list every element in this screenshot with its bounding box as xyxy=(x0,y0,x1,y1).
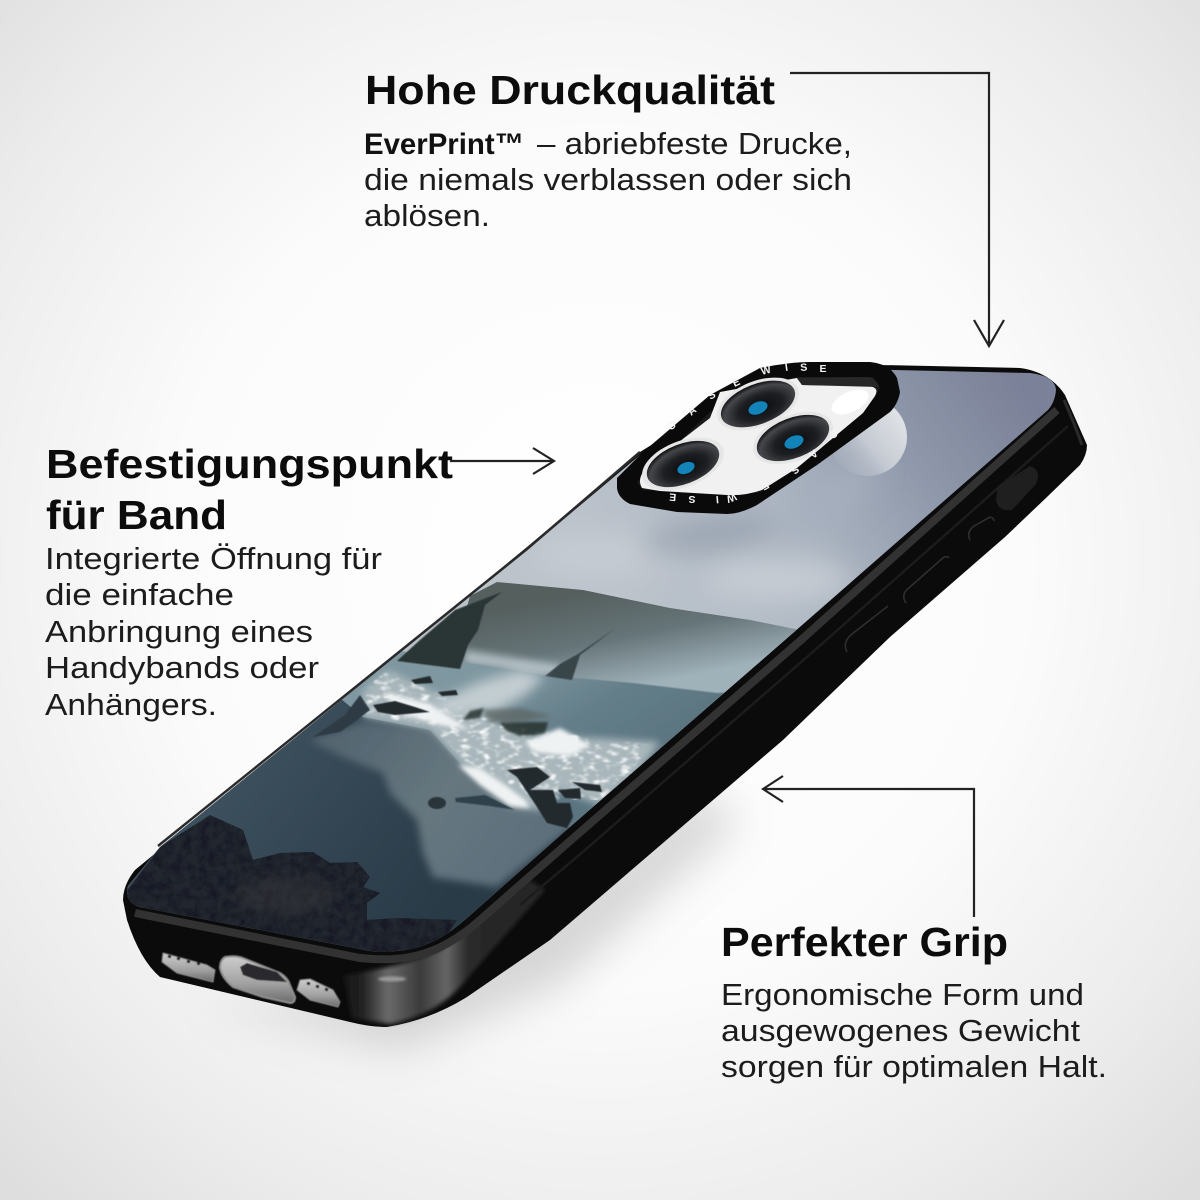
heading: Hohe Druckqualität xyxy=(365,67,775,113)
volume down button xyxy=(845,606,888,652)
heading: für Band xyxy=(46,492,227,538)
speaker right xyxy=(297,979,340,1007)
rock lighter centre xyxy=(238,876,331,914)
description: ausgewogenes Gewicht xyxy=(721,1013,1080,1048)
lens left xyxy=(635,427,731,501)
case corner highlight xyxy=(343,880,545,1024)
brand text bottom: CASEWISE xyxy=(669,427,840,505)
module flash xyxy=(828,384,872,420)
description xyxy=(45,541,382,722)
clouds xyxy=(588,511,854,609)
moon xyxy=(835,408,907,476)
description xyxy=(364,126,852,233)
beach pebble xyxy=(428,797,446,809)
description: die niemals verblassen oder sich xyxy=(364,162,852,197)
phone xyxy=(100,340,1100,1027)
callout: print quality xyxy=(364,67,1004,346)
module shading xyxy=(797,377,879,387)
description: EverPrint™ xyxy=(364,128,524,161)
description: – abriebfeste Drucke, xyxy=(537,126,852,161)
description: die einfache xyxy=(45,577,234,612)
lens top xyxy=(710,367,806,441)
corner glint xyxy=(378,976,406,982)
description xyxy=(721,977,1107,1084)
crest brown xyxy=(482,708,552,722)
beach wet streak xyxy=(455,795,515,810)
callout: strap attachment xyxy=(45,441,554,722)
description: Handybands oder xyxy=(45,650,319,685)
foam white core xyxy=(385,692,590,808)
camera bumper xyxy=(617,362,900,514)
speaker grille side xyxy=(996,466,1038,510)
callout: grip xyxy=(721,776,1107,1084)
arrow to print xyxy=(790,73,1004,346)
sea xyxy=(312,650,725,851)
description: Ergonomische Form und xyxy=(721,977,1084,1012)
sky xyxy=(127,370,1056,952)
arrow to case side xyxy=(763,776,974,917)
screen edge line xyxy=(158,452,640,846)
charging port xyxy=(220,956,295,1003)
near rocks xyxy=(507,767,573,828)
small rocks xyxy=(411,676,458,696)
shore rocks xyxy=(313,676,602,828)
phone shadow xyxy=(200,790,740,1050)
action button xyxy=(969,517,994,540)
volume up button xyxy=(904,557,949,603)
flat rock xyxy=(373,701,430,715)
description: Anhängers. xyxy=(45,687,217,722)
description: sorgen für optimalen Halt. xyxy=(721,1049,1107,1084)
heading xyxy=(46,441,453,538)
side buttons xyxy=(845,517,994,652)
hill mist xyxy=(463,650,560,676)
description: Integrierte Öffnung für xyxy=(45,541,382,576)
foam speckle xyxy=(362,670,650,800)
wave foam xyxy=(362,670,660,810)
bumper ring xyxy=(617,362,900,514)
spray plume xyxy=(435,670,545,714)
left sea stack xyxy=(397,592,502,669)
crest shadow xyxy=(463,708,548,736)
brand text top: CASEWISE xyxy=(665,362,827,433)
description: Anbringung eines xyxy=(45,614,313,649)
left shore rock xyxy=(313,695,370,737)
right sea stack xyxy=(545,628,616,680)
ring inner ledge xyxy=(637,377,880,495)
wet sand lighter area xyxy=(310,722,575,887)
heading: Befestigungspunkt xyxy=(46,441,453,487)
speaker left xyxy=(162,953,215,982)
foam band xyxy=(362,670,660,810)
beach xyxy=(127,700,570,950)
foreground rocks xyxy=(120,815,457,960)
lens right xyxy=(746,401,840,475)
distant hill xyxy=(462,582,797,696)
arrow to strap point xyxy=(450,448,554,474)
camera module xyxy=(640,378,876,495)
heading: Perfekter Grip xyxy=(721,919,1008,965)
phone case body xyxy=(123,364,1087,1027)
case bevel lines xyxy=(135,400,1082,959)
description: ablösen. xyxy=(364,198,490,233)
screen print xyxy=(127,370,1056,952)
